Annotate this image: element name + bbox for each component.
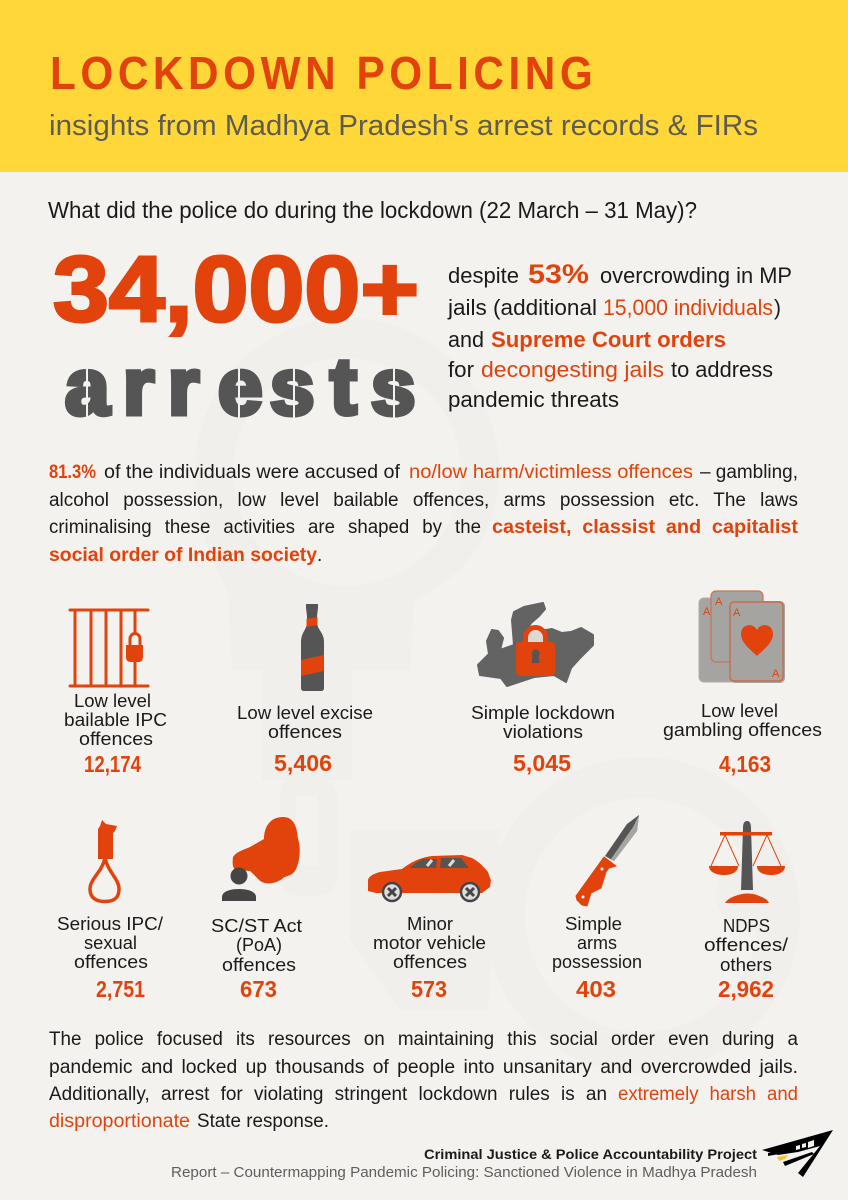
text block: overcrowding: 53% [528, 259, 589, 289]
label: SC/ST: SC/ST Act [211, 915, 302, 936]
footer credits [171, 1147, 758, 1181]
text block: overcrowding: for [448, 357, 474, 382]
label: gambling: gambling offences [663, 719, 822, 740]
logo [762, 1130, 833, 1177]
label: SC/ST [211, 915, 302, 1002]
text block: victimless offences: . [317, 545, 322, 566]
icon: car [368, 855, 491, 901]
label: NDPS: others [720, 954, 772, 975]
text block: conclusion [49, 1029, 798, 1132]
icon: noose [90, 820, 119, 902]
icon: scales of justice [709, 821, 785, 903]
text block: conclusion: State response. [197, 1111, 329, 1132]
text block: victimless offences [49, 462, 799, 566]
icon: knife [576, 815, 639, 906]
label: SC/ST: offences [222, 954, 296, 975]
text block: overcrowding: to address [671, 357, 773, 382]
text block: victimless offences: alcohol possession, low level bailable offences, arms possession etc. The laws [49, 490, 798, 511]
text block: victimless offences: no/low harm/victimless offences [409, 462, 693, 483]
text block: conclusion: The police focused its resources on maintaining this social order even during a [49, 1029, 798, 1050]
text block: conclusion: disproportionate [49, 1111, 190, 1132]
text block: overcrowding: pandemic threats [448, 387, 619, 412]
label: bailable IPC: Low level [74, 690, 151, 711]
footer credits: Report – Countermapping Pandemic Policing: Sanctioned Violence in Madhya Pradesh [171, 1165, 757, 1181]
label: motor vehicle [373, 913, 486, 1002]
label: excise: Low level excise [237, 702, 373, 723]
label: motor vehicle: 573 [411, 976, 447, 1002]
label: motor vehicle: offences [393, 951, 467, 972]
label: motor vehicle: motor vehicle [373, 932, 486, 953]
big number: 34,000+: 34,000+ [53, 237, 419, 341]
header band [0, 0, 848, 172]
icon: Madhya Pradesh map with padlock [478, 603, 593, 686]
text block: victimless offences: social order of Indian society [49, 545, 317, 566]
label: motor vehicle: Minor [407, 913, 453, 934]
label: lockdown violations: Simple lockdown [471, 702, 615, 723]
label: SC/ST: (PoA) [236, 934, 282, 955]
icon: playing cards: A [703, 606, 711, 618]
text block: overcrowding: ) [774, 295, 781, 320]
label: gambling: 4,163 [719, 751, 771, 777]
icon: jail bars with padlock [70, 610, 148, 686]
label: arms: 403 [576, 976, 616, 1002]
icon: playing cards [699, 591, 785, 683]
text block: overcrowding: Supreme Court orders [491, 327, 726, 352]
label: gambling: Low level [701, 700, 778, 721]
question heading: What did the police do during the lockdown (22 March – 31 May)? [48, 197, 697, 223]
label: lockdown violations [471, 702, 615, 776]
big word: arrests: arrests [65, 342, 416, 431]
label: NDPS [704, 915, 789, 1002]
label: excise [237, 702, 373, 776]
text block: victimless offences: 81.3% [49, 462, 96, 483]
text block: conclusion: extremely harsh and [618, 1084, 798, 1105]
footer credits: Criminal Justice & Police Accountability Project [424, 1147, 758, 1162]
label: excise: offences [268, 721, 342, 742]
icon: playing cards: A [733, 607, 741, 619]
label: serious offences [57, 913, 164, 1002]
icon: playing cards: A [772, 668, 780, 680]
label: serious offences: sexual [84, 932, 137, 953]
label: NDPS: 2,962 [718, 976, 774, 1002]
label: NDPS: NDPS [723, 915, 770, 936]
label: bailable IPC [64, 690, 167, 777]
label: bailable IPC: bailable IPC [64, 709, 167, 730]
text block: conclusion: Additionally, arrest for violating stringent lockdown rules is an [49, 1084, 607, 1105]
label: lockdown violations: 5,045 [513, 750, 571, 776]
label: arms: Simple [565, 913, 622, 934]
text block: victimless offences: of the individuals were accused of [104, 462, 401, 483]
text block: victimless offences: criminalising these activities are shaped by the [49, 517, 481, 538]
subtitle: insights from Madhya Pradesh's arrest records & FIRs [49, 110, 758, 142]
label: NDPS: offences/ [704, 934, 789, 955]
label: lockdown violations: violations [503, 721, 583, 742]
label: arms: possession [552, 951, 642, 972]
text block: victimless offences: – gambling, [700, 462, 798, 483]
label: arms [552, 913, 642, 1002]
title: LOCKDOWN POLICING [50, 48, 593, 99]
text block: overcrowding: decongesting jails [481, 357, 664, 382]
label: serious offences: 2,751 [96, 976, 145, 1002]
label: serious offences: Serious IPC/ [57, 913, 164, 934]
text block: overcrowding [447, 259, 792, 412]
text block: overcrowding: and [448, 327, 484, 352]
label: SC/ST: 673 [240, 976, 277, 1002]
label: bailable IPC: 12,174 [84, 751, 141, 777]
text block: overcrowding: jails (additional [447, 295, 597, 320]
label: gambling [663, 700, 822, 777]
label: excise: 5,406 [274, 750, 332, 776]
text block: victimless offences: casteist, classist and capitalist [492, 517, 799, 538]
text block: overcrowding: despite [448, 263, 519, 288]
icon: pointing hand over person [222, 817, 300, 901]
text block: overcrowding: 15,000 individuals [603, 295, 773, 320]
text block: overcrowding: overcrowding in MP [600, 263, 792, 288]
label: bailable IPC: offences [79, 728, 153, 749]
label: serious offences: offences [74, 951, 148, 972]
text block: conclusion: pandemic and locked up thousands of people into unsanitary and overcrowded jails. [49, 1057, 798, 1078]
watermark: handcuffs [195, 318, 800, 1073]
label: arms: arms [577, 932, 617, 953]
icon: playing cards: A [715, 596, 723, 608]
icon: bottle [301, 604, 324, 691]
